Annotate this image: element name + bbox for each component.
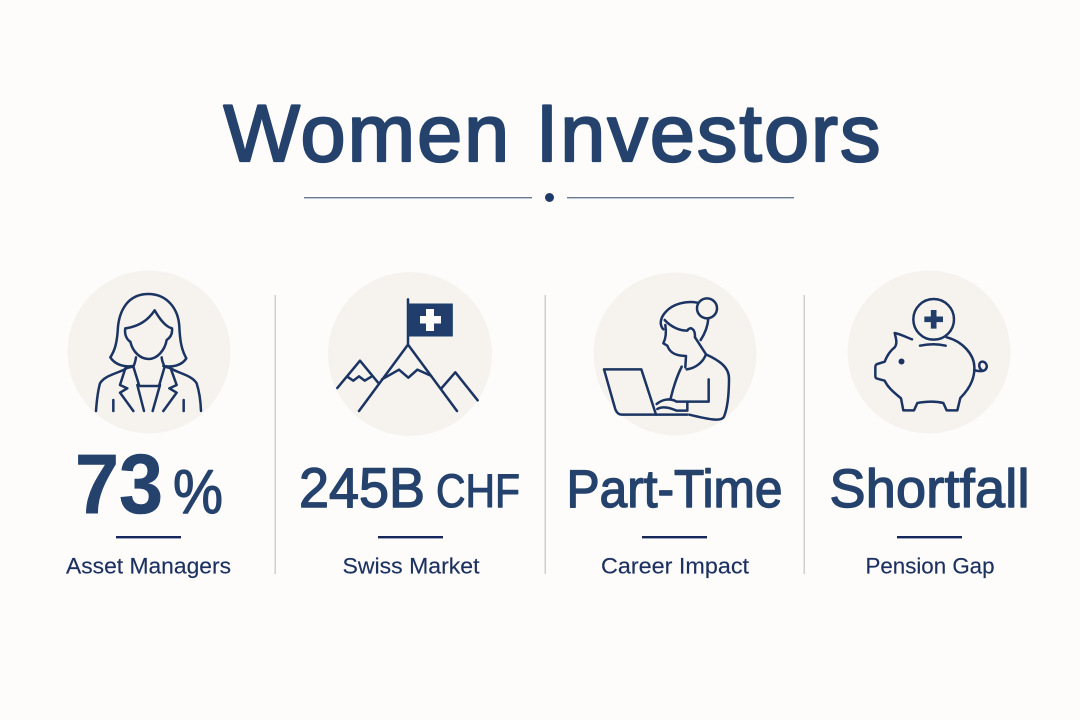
value xyxy=(75,437,223,531)
label: Asset Managers xyxy=(66,554,231,578)
value: 245B xyxy=(299,456,425,519)
panel: asset managers xyxy=(66,270,231,578)
title divider xyxy=(304,193,794,202)
label: Career Impact xyxy=(601,554,749,578)
icon: woman in blazer xyxy=(68,270,230,434)
label: Swiss Market xyxy=(342,554,480,578)
value: CHF xyxy=(436,464,520,517)
value: % xyxy=(173,458,223,527)
value: Part-Time xyxy=(566,460,782,519)
flag cross xyxy=(420,309,441,331)
title: Women Investors xyxy=(224,89,880,179)
icon: mountains with swiss flag xyxy=(328,272,492,436)
icon: woman at laptop xyxy=(594,272,756,436)
panel: pension gap xyxy=(830,270,1030,578)
value: Shortfall xyxy=(830,459,1030,519)
label: Pension Gap xyxy=(866,554,994,578)
panel: swiss market xyxy=(299,272,520,578)
value xyxy=(299,456,520,519)
icon: piggy bank with plus coin xyxy=(848,270,1010,434)
panel: career impact xyxy=(566,272,782,578)
value: 73 xyxy=(75,437,163,531)
